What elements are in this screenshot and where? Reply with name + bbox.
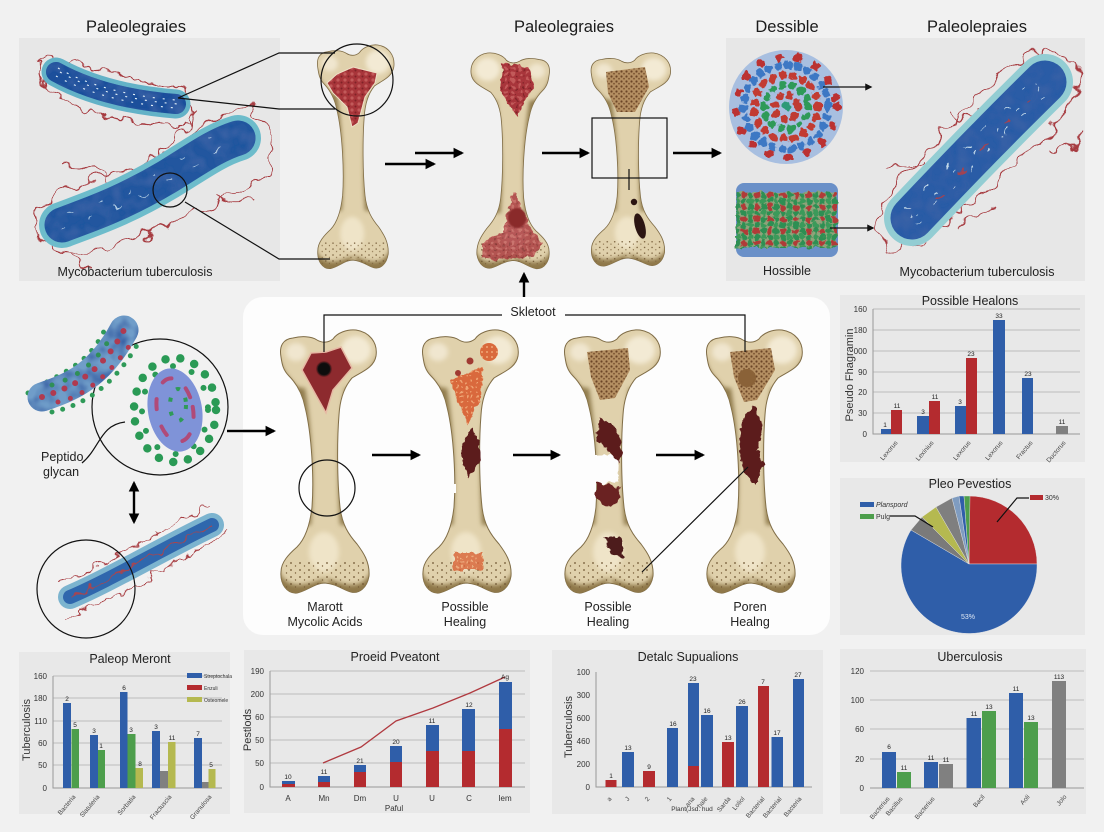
bone: top 3 bbox=[583, 53, 676, 273]
value labels: 113 bbox=[1054, 674, 1065, 681]
bars bbox=[63, 692, 216, 788]
value labels: 23 bbox=[689, 676, 697, 683]
value labels bbox=[883, 313, 1066, 429]
arrow: stage 3 to 4 bbox=[656, 454, 703, 456]
label: Mycobacterium tuberculosis bbox=[58, 265, 212, 279]
value labels: 11 bbox=[971, 711, 978, 718]
legend: Streptochala bbox=[204, 674, 232, 680]
label: stage 4: Poren bbox=[733, 600, 767, 614]
leader lines bbox=[890, 498, 1029, 527]
axis labels: 50 bbox=[38, 761, 48, 770]
axis labels: 50 bbox=[255, 736, 265, 745]
x title: Paful bbox=[385, 804, 403, 813]
arrow: top row b bbox=[415, 152, 462, 154]
category labels bbox=[606, 795, 804, 820]
value labels: 1 bbox=[609, 773, 613, 780]
axis labels: 120 bbox=[851, 667, 865, 676]
value labels: 2 bbox=[65, 696, 69, 703]
value labels: 13 bbox=[1027, 715, 1035, 722]
axis labels: 20 bbox=[858, 388, 868, 397]
value labels: 11 bbox=[1013, 686, 1020, 693]
category labels: C bbox=[466, 794, 472, 803]
axis labels: 60 bbox=[38, 739, 48, 748]
category labels: U bbox=[393, 794, 399, 803]
category labels: Lexorus bbox=[984, 439, 1005, 462]
value labels: 11 bbox=[894, 403, 901, 410]
bone: stage 4 bbox=[697, 330, 809, 602]
axis labels: 460 bbox=[577, 737, 591, 746]
label: stage 4: Healng bbox=[730, 615, 770, 629]
arrow: stage 2 to 3 bbox=[513, 454, 559, 456]
icon: large bacterium bbox=[34, 108, 272, 268]
category labels: 2 bbox=[644, 795, 652, 803]
value labels: 13 bbox=[724, 735, 732, 742]
bars bbox=[882, 681, 1066, 788]
axis labels bbox=[854, 305, 868, 439]
category labels: Lexinius bbox=[915, 439, 936, 463]
axis labels: 000 bbox=[854, 347, 868, 356]
label: stage 1: Mycolic Acids bbox=[287, 615, 363, 629]
category labels: Dm bbox=[354, 794, 367, 803]
title: centre: Paleolegraies bbox=[514, 18, 614, 36]
axis labels bbox=[34, 672, 48, 793]
panel: pie chart bbox=[840, 477, 1085, 635]
arrow: top row d bbox=[673, 152, 720, 154]
category labels: Mn bbox=[318, 794, 330, 803]
panel: chart possible healons bbox=[840, 294, 1085, 464]
value labels: 3 bbox=[129, 727, 133, 734]
category labels: Bacil bbox=[972, 793, 987, 809]
axis labels: 100 bbox=[851, 696, 865, 705]
legend: Planspord bbox=[876, 502, 909, 509]
axis labels: 0 bbox=[586, 783, 591, 792]
value labels: 6 bbox=[887, 744, 891, 751]
title: left: Paleolegraies bbox=[86, 18, 186, 36]
axis labels: 190 bbox=[251, 667, 265, 676]
value labels: 5 bbox=[209, 762, 213, 769]
stacked bars bbox=[282, 682, 512, 787]
y title: Pseudo Fhagramin bbox=[844, 329, 856, 421]
axis labels: 200 bbox=[577, 760, 591, 769]
category labels: a bbox=[606, 795, 614, 803]
label: stage 2: Possible bbox=[441, 600, 489, 614]
axis labels: 50 bbox=[255, 759, 265, 768]
legend: 30% bbox=[1045, 495, 1059, 502]
arrow: to central panel bbox=[227, 430, 243, 432]
legend: Enzuli bbox=[204, 686, 218, 692]
value labels: 11 bbox=[928, 755, 935, 762]
value labels: 5 bbox=[73, 722, 77, 729]
trend line bbox=[323, 677, 505, 763]
pie bbox=[901, 496, 1037, 633]
category labels: 1 bbox=[666, 795, 674, 803]
callout: zoom circle with blob bbox=[92, 339, 228, 475]
icon: sphere cross section bbox=[729, 50, 843, 164]
value labels bbox=[887, 674, 1065, 772]
axis labels: 20 bbox=[855, 755, 865, 764]
axis labels: 90 bbox=[858, 368, 868, 377]
bars bbox=[606, 679, 804, 787]
title: right: Paleolepraies bbox=[927, 18, 1027, 36]
legend: Osteomele bbox=[204, 698, 228, 704]
axis labels: 600 bbox=[577, 714, 591, 723]
heading: Uberculosis bbox=[937, 650, 1003, 664]
axis labels: 110 bbox=[34, 717, 48, 726]
value labels: Ag bbox=[501, 674, 509, 681]
value labels: 11 bbox=[932, 394, 939, 401]
value labels: 16 bbox=[669, 721, 677, 728]
panel: chart uberculosis bbox=[840, 649, 1086, 821]
value labels bbox=[609, 672, 802, 780]
category labels: A bbox=[285, 794, 291, 803]
value labels: 3 bbox=[154, 724, 158, 731]
value labels: 33 bbox=[995, 313, 1003, 320]
arrow: stage 1 to 2 bbox=[372, 454, 419, 456]
arrow: up from skeleton bbox=[523, 274, 525, 303]
value labels: 20 bbox=[392, 739, 400, 746]
label: hossible: Hossible bbox=[763, 264, 811, 278]
value labels: 11 bbox=[321, 769, 328, 776]
value labels: 6 bbox=[122, 685, 126, 692]
icon: lower bacterium bbox=[37, 506, 228, 638]
legend bbox=[187, 673, 232, 704]
category labels bbox=[869, 793, 1069, 821]
panel: chart detalc supualions bbox=[552, 650, 823, 820]
label: stage 3: Possible bbox=[584, 600, 632, 614]
icon: spiked bacterium bbox=[28, 322, 140, 412]
icon: curved bacterium bbox=[40, 58, 192, 125]
category labels: Bacterius bbox=[914, 795, 937, 821]
category labels: Slatuleria bbox=[79, 793, 102, 819]
category labels: Sarda bbox=[716, 796, 733, 814]
category labels bbox=[57, 793, 214, 821]
gridlines bbox=[53, 676, 222, 765]
category labels: ana bbox=[684, 796, 697, 809]
label: stage 3: Healing bbox=[587, 615, 629, 629]
value labels bbox=[284, 674, 509, 781]
y title: Tuberculosis bbox=[563, 696, 575, 758]
value labels bbox=[65, 685, 213, 769]
value labels: 17 bbox=[773, 730, 781, 737]
category labels: Bacteria bbox=[57, 794, 78, 817]
value labels: 11 bbox=[943, 757, 950, 764]
value labels: 23 bbox=[967, 351, 975, 358]
label: mycobacterium: Mycobacterium tuberculosis bbox=[900, 265, 1054, 279]
category labels: Lexorus bbox=[879, 439, 900, 462]
value labels: 8 bbox=[138, 761, 142, 768]
category labels: Sorbatia bbox=[117, 793, 138, 817]
value labels: 11 bbox=[901, 765, 908, 772]
y title: Tuberculosis bbox=[21, 699, 33, 761]
category labels: Iem bbox=[498, 794, 512, 803]
value labels: 12 bbox=[465, 702, 473, 709]
value labels: 11 bbox=[429, 718, 436, 725]
bars bbox=[881, 320, 1068, 434]
value labels: 13 bbox=[985, 704, 993, 711]
category labels: Fractus bbox=[1015, 439, 1035, 461]
axis labels: 180 bbox=[854, 326, 868, 335]
arrow: top row c bbox=[542, 152, 588, 154]
axis labels: 60 bbox=[255, 713, 265, 722]
axis labels: 60 bbox=[855, 725, 865, 734]
value labels: 23 bbox=[1024, 371, 1032, 378]
category labels: Bacterial bbox=[745, 795, 767, 820]
value labels: 7 bbox=[761, 679, 765, 686]
label: peptidoglycan bbox=[41, 422, 125, 479]
category labels: Granulosa bbox=[189, 793, 214, 821]
panel: central skeleton bbox=[243, 297, 830, 635]
axis labels: 180 bbox=[34, 694, 48, 703]
axis labels: 30 bbox=[858, 409, 868, 418]
value labels: 26 bbox=[738, 699, 746, 706]
label: stage 2: Healing bbox=[444, 615, 486, 629]
bone: top 2 bbox=[465, 53, 557, 276]
label: peptidoglycan: glycan bbox=[43, 465, 79, 479]
heading: Detalc Supualions bbox=[638, 650, 738, 664]
bone: stage 1 bbox=[271, 330, 383, 602]
value labels: 3 bbox=[921, 409, 925, 416]
x title: Plant(Jsd. hud bbox=[671, 806, 713, 813]
category labels: Bacterius bbox=[869, 795, 892, 821]
value labels: 9 bbox=[647, 764, 651, 771]
y title: Pestlods bbox=[242, 708, 254, 751]
icon: diagonal bacterium bbox=[880, 51, 1085, 254]
category labels: hale bbox=[696, 795, 710, 810]
panel: bacteria top right bbox=[726, 38, 1085, 281]
value labels: 11 bbox=[169, 735, 176, 742]
bone: stage 2 bbox=[413, 330, 525, 602]
panel: bacteria top left bbox=[19, 38, 280, 281]
category labels: U bbox=[429, 794, 435, 803]
value labels: 27 bbox=[794, 672, 802, 679]
value labels: 3 bbox=[92, 728, 96, 735]
category labels: Bacteria bbox=[783, 796, 804, 819]
value labels: 1 bbox=[883, 422, 887, 429]
gridlines bbox=[870, 671, 1084, 759]
label: skeleton: Skletoot bbox=[510, 305, 556, 319]
bone: stage 3 bbox=[555, 330, 667, 602]
icon: membrane block bbox=[736, 183, 838, 257]
title: dessible: Dessible bbox=[755, 18, 819, 36]
value labels: 13 bbox=[624, 745, 632, 752]
category labels: Lexorus bbox=[952, 439, 973, 462]
arrow: double headed bbox=[133, 483, 135, 522]
category labels: J bbox=[624, 796, 632, 803]
pie value: 53% bbox=[961, 614, 975, 621]
axis labels bbox=[251, 667, 265, 792]
axis labels: 160 bbox=[854, 305, 868, 314]
axis labels: 0 bbox=[43, 784, 48, 793]
axis labels: 0 bbox=[863, 430, 868, 439]
gridlines and axes bbox=[873, 309, 1080, 413]
category labels: Bacillus bbox=[885, 795, 905, 817]
arrow tip over panel bbox=[243, 430, 274, 432]
arrow: top row a bbox=[385, 163, 434, 165]
callout: lines to bone head bbox=[153, 44, 393, 259]
arrow: block to bacterium bbox=[830, 227, 873, 229]
gridlines bbox=[270, 671, 525, 763]
value labels: 21 bbox=[356, 758, 364, 765]
heading: Paleop Meront bbox=[89, 652, 171, 666]
category labels: Bacterial bbox=[762, 795, 784, 820]
heading: Pleo Pevestios bbox=[929, 477, 1011, 491]
heading: Proeid Pveatont bbox=[351, 650, 440, 664]
callout: detail square bbox=[592, 118, 667, 178]
axis labels: 100 bbox=[577, 668, 591, 677]
value labels: 11 bbox=[1059, 419, 1066, 426]
heading: Possible Healons bbox=[922, 294, 1018, 308]
category labels bbox=[285, 794, 512, 803]
callout: skeleton bracket bbox=[324, 315, 748, 572]
legend: Pulg bbox=[876, 514, 890, 521]
bone: top 1 bbox=[310, 45, 399, 276]
panel: chart proeid pveatont bbox=[242, 650, 530, 813]
category labels: Aoli bbox=[1019, 794, 1032, 807]
axis labels bbox=[851, 667, 865, 793]
axis labels: 0 bbox=[860, 784, 865, 793]
value labels: 7 bbox=[196, 731, 200, 738]
arrow: sphere to bacterium bbox=[823, 86, 871, 88]
axis labels bbox=[577, 668, 591, 792]
axis labels: 160 bbox=[34, 672, 48, 681]
panel: bacteria left column bbox=[28, 322, 228, 638]
category labels: Ductorus bbox=[1045, 439, 1068, 464]
label: stage 1: Marott bbox=[307, 600, 343, 614]
axis labels: 200 bbox=[251, 690, 265, 699]
category labels: Fractuscia bbox=[149, 793, 174, 821]
value labels: 1 bbox=[99, 743, 103, 750]
panel: chart paleop meront bbox=[19, 652, 232, 821]
category labels: Jolo bbox=[1055, 794, 1069, 807]
value labels: 3 bbox=[958, 399, 962, 406]
value labels: 10 bbox=[284, 774, 292, 781]
category labels: Loliol bbox=[731, 795, 747, 812]
legend bbox=[860, 495, 1059, 521]
category labels bbox=[879, 439, 1068, 464]
label: peptidoglycan: Peptido bbox=[41, 450, 83, 464]
axis labels: 300 bbox=[577, 691, 591, 700]
axis labels: 0 bbox=[260, 783, 265, 792]
value labels: 16 bbox=[703, 708, 711, 715]
